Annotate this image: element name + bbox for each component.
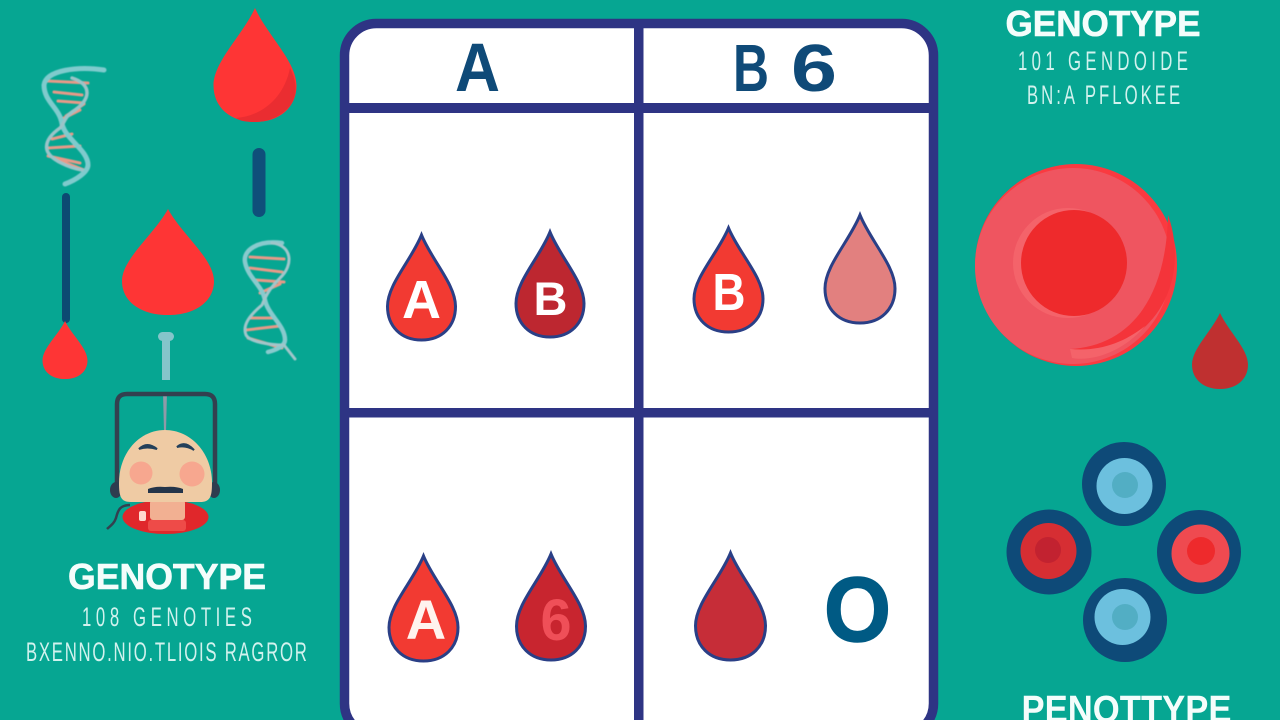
heading: column B 6: B: [733, 31, 769, 106]
drop: dark red: [696, 553, 766, 660]
heading: right genotype: GENOTYPE: [1006, 3, 1200, 44]
cell: bottom blue: [1083, 578, 1167, 662]
icon: DNA helix bottom: [245, 242, 295, 359]
text: left line 1: 108 GENOTIES: [82, 602, 252, 632]
icon: dark red drop: [1192, 313, 1248, 389]
cell: left red: [1006, 510, 1092, 594]
bar: navy long: [62, 193, 70, 323]
drop: B top left: [516, 232, 584, 337]
icon: large blood drop top: [214, 8, 296, 122]
icon: face character: [107, 392, 220, 534]
panel: blood type grid: [344, 24, 934, 720]
icon: DNA helix top: [44, 69, 104, 184]
drop: pink: [825, 215, 895, 323]
heading: left genotype: GENOTYPE: [68, 556, 266, 597]
icon: small blood drop: [42, 321, 88, 379]
icon: red blood cell: [975, 164, 1177, 366]
text: right line 1: 101 GENDOIDE: [1018, 46, 1188, 76]
drop: A bottom left: [389, 556, 458, 661]
drop: B top right: B: [712, 264, 746, 322]
drop: B top right: [694, 228, 763, 332]
heading: column B 6: [733, 31, 837, 106]
drop: 6 bottom left: 6: [540, 588, 572, 653]
drop: A top left: [388, 235, 456, 340]
drop: A bottom left: A: [406, 588, 446, 651]
letter: O: O: [824, 559, 891, 661]
icon: dropper pin: [158, 332, 174, 380]
bar: navy top right of left column: [252, 148, 266, 217]
drop: A top left: A: [402, 270, 441, 330]
drop: 6 bottom left: [516, 554, 586, 660]
cell: right red: [1157, 510, 1241, 594]
heading: column B 6: 6: [791, 31, 837, 106]
text: right line 2: BN:A PFLOKEE: [1027, 80, 1180, 110]
text: left line 2: BXENNO.NIO.TLIOIS RAGROR: [26, 637, 307, 667]
heading: column A: A: [455, 29, 500, 106]
icon: middle blood drop: [122, 209, 214, 315]
cell: top blue: [1082, 442, 1166, 526]
drop: B top left: B: [534, 272, 567, 325]
